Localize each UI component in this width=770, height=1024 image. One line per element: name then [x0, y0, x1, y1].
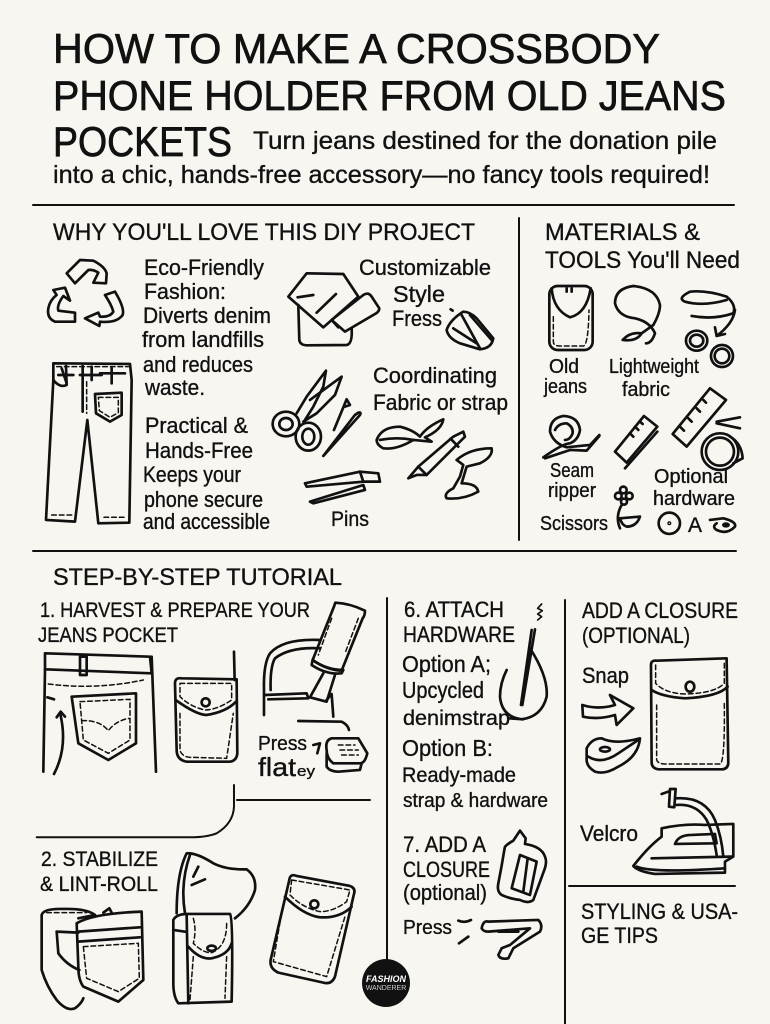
text: practical and hands-free: Practical &	[145, 413, 248, 438]
label: press flat: ey	[297, 763, 316, 780]
text: practical and hands-free	[143, 413, 270, 534]
icon: snap	[659, 513, 680, 534]
heading: materials and tools: MATERIALS &	[545, 219, 700, 246]
text: customizable style	[359, 255, 491, 331]
heading: add a closure: ADD A CLOSURE	[582, 598, 738, 623]
icon: scissors and needles	[273, 371, 361, 456]
icon: bent tube	[458, 920, 541, 959]
divider curve	[37, 785, 234, 837]
step 1 heading	[38, 599, 310, 647]
step 6 heading	[403, 597, 515, 647]
text: practical and hands-free: phone secure	[144, 487, 263, 512]
icon: layered pockets	[42, 908, 143, 1009]
text: practical and hands-free: Hands-Free	[145, 438, 253, 463]
icon: snap piece	[587, 738, 640, 773]
text: step 6 options: Ready-made	[402, 764, 516, 787]
heading: materials and tools: TOOLS You'll Need	[545, 247, 740, 274]
text: coordinating fabric or strap: Fabric or strap	[373, 390, 508, 415]
panel: why you'll love this DIY project	[46, 219, 508, 534]
step 2 heading: 2. STABILIZE	[41, 848, 158, 871]
step 6 heading: 6. ATTACH	[404, 597, 504, 622]
icon: cut pocket	[175, 652, 237, 762]
step 7 heading: (optional)	[403, 880, 487, 905]
label: scissors: Scissors	[540, 513, 608, 535]
logo: fashion wanderer: FASHION	[366, 974, 406, 984]
icon: flower	[615, 487, 640, 528]
heading: materials and tools	[545, 219, 740, 274]
text: step 6 options: Option B:	[402, 735, 493, 761]
icon: finished pocket	[651, 658, 728, 769]
text: step 6 options	[402, 651, 548, 812]
label: press flat	[258, 733, 316, 782]
text: eco-friendly fashion: Diverts denim	[143, 303, 271, 328]
step 1 heading: 1. HARVEST & PREPARE YOUR	[40, 599, 310, 622]
icon: small ruler	[615, 416, 657, 468]
step 7 heading: CLOSURE	[403, 857, 490, 882]
icon: clips	[447, 309, 493, 349]
icon: cord and rings	[682, 291, 735, 367]
text: customizable style: Style	[393, 281, 445, 307]
text: coordinating fabric or strap: Coordinating	[373, 363, 497, 388]
text: customizable style: Customizable	[359, 255, 491, 280]
text: step 6 options: Option A;	[402, 651, 491, 677]
logo: fashion wanderer	[362, 959, 410, 1007]
icon: pins	[305, 472, 380, 503]
heading: step-by-step tutorial: STEP-BY-STEP TUTORIAL	[53, 564, 342, 591]
icon: folded denim	[288, 273, 379, 345]
icon: recycle symbol	[48, 260, 123, 326]
label: seam ripper: Seam	[550, 460, 594, 482]
label: hardware A: A	[688, 514, 702, 537]
subtitle: into a chic, hands-free accessory—no fancy tools required!	[53, 161, 710, 189]
icon: tilted pocket	[270, 875, 354, 983]
subtitle	[53, 127, 717, 189]
step 6 heading: HARDWARE	[403, 622, 515, 647]
icon: hardware ring	[710, 518, 735, 532]
label: seam ripper: ripper	[548, 480, 596, 502]
heading: styling and usage tips: STYLING & USA-	[581, 899, 738, 924]
text: eco-friendly fashion: waste.	[144, 375, 205, 400]
label: lightweight fabric: fabric	[622, 379, 670, 401]
text: step 6 options: denimstrap	[403, 707, 510, 730]
title	[53, 25, 726, 165]
label: old jeans	[543, 356, 587, 398]
icon: iron	[633, 789, 733, 874]
icon: lint roller	[264, 603, 365, 730]
icon: folded pocket bag	[173, 853, 255, 1003]
icon: pressing block	[313, 738, 367, 772]
label: press flat: Press	[258, 733, 307, 755]
heading: styling and usage tips	[581, 899, 738, 948]
text: practical and hands-free: Keeps your	[143, 462, 241, 487]
text: eco-friendly fashion: and reduces	[143, 352, 253, 377]
icon: long ruler and tape	[673, 388, 743, 470]
text: customizable style: Fress	[392, 306, 442, 331]
title: PHONE HOLDER FROM OLD JEANS	[53, 72, 726, 119]
heading: add a closure	[582, 598, 738, 648]
label: optional hardware	[653, 466, 735, 510]
title: POCKETS	[53, 118, 232, 165]
icon: jeans	[46, 363, 132, 523]
label: lightweight fabric	[609, 356, 699, 401]
icon: ribbon, marker and pad	[377, 419, 492, 499]
icon: arrow	[582, 695, 633, 725]
label: press: Press	[403, 917, 452, 939]
text: coordinating fabric or strap	[373, 363, 508, 415]
text: practical and hands-free: and accessible	[143, 509, 270, 534]
panel: step-by-step tutorial	[37, 564, 738, 1009]
text: step 6 options: Upcycled	[402, 677, 484, 703]
text: eco-friendly fashion: Fashion:	[144, 279, 226, 304]
step 7 heading: 7. ADD A	[403, 832, 486, 857]
label: velcro: Velcro	[580, 821, 638, 846]
heading: why you'll love: WHY YOU'LL LOVE THIS DIY PROJECT	[53, 219, 475, 246]
icon: needle and thread	[500, 604, 547, 719]
step 7 heading	[403, 832, 490, 905]
text: eco-friendly fashion: Eco-Friendly	[144, 255, 264, 280]
icon: jeans pocket	[549, 286, 593, 350]
label: snap: Snap	[582, 663, 629, 688]
step 1 heading: JEANS POCKET	[38, 624, 178, 647]
icon: seam ripper	[543, 416, 599, 458]
icon: glue bottle	[498, 831, 546, 902]
title: HOW TO MAKE A CROSSBODY	[53, 25, 660, 72]
label: press flat: flat	[258, 752, 297, 782]
label: seam ripper	[548, 460, 596, 502]
panel: materials and tools	[540, 219, 743, 537]
heading: styling and usage tips: GE TIPS	[581, 923, 658, 948]
icon: fabric loop	[615, 286, 660, 343]
label: optional hardware: Optional	[654, 466, 728, 488]
step 2 heading: & LINT-ROLL	[40, 873, 158, 896]
label: lightweight fabric: Lightweight	[609, 356, 699, 378]
text: step 6 options: strap & hardware	[403, 790, 548, 812]
label: old jeans: jeans	[543, 376, 587, 398]
label: old jeans: Old	[549, 356, 579, 378]
logo: fashion wanderer: WANDERER	[366, 985, 406, 992]
text: eco-friendly fashion	[142, 255, 271, 400]
text: eco-friendly fashion: from landfills	[142, 327, 264, 352]
heading: add a closure: (OPTIONAL)	[582, 623, 690, 648]
icon: jeans back with pocket	[43, 653, 156, 774]
label: optional hardware: hardware	[653, 488, 735, 510]
label: pins: Pins	[331, 508, 369, 531]
step 2 heading	[40, 848, 158, 896]
subtitle: Turn jeans destined for the donation pile	[253, 127, 717, 155]
